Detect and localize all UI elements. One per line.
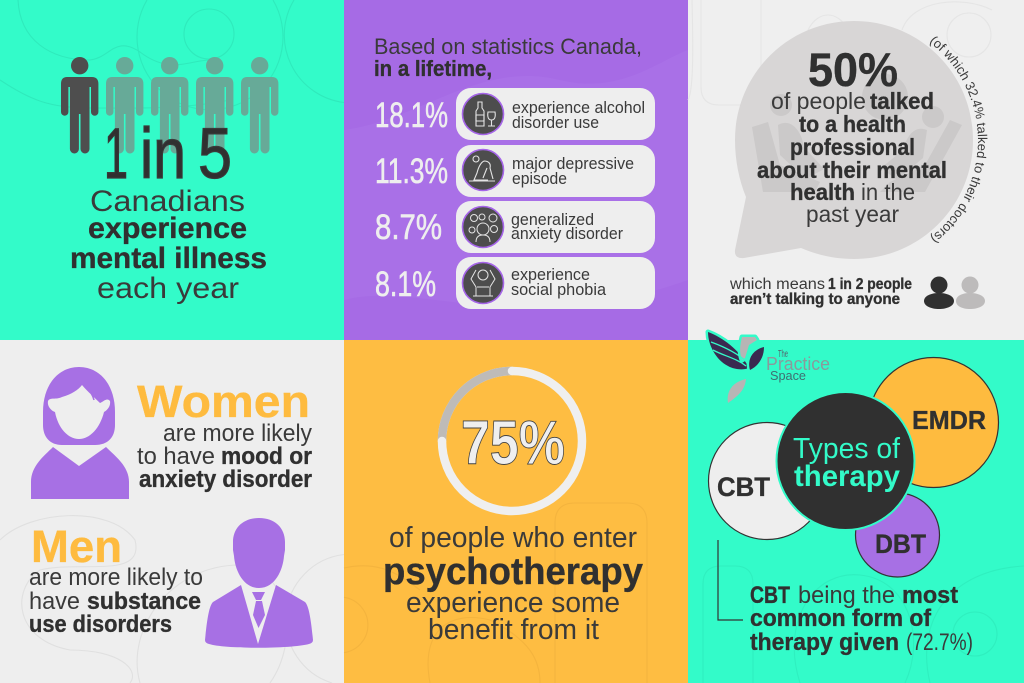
stat: 11.3% major depressive episode: 11.3%: [375, 152, 448, 191]
text block: people who talked to a professional: past year: [806, 201, 899, 227]
text block: people who enter psychotherapy: psychotherapy: [383, 551, 643, 593]
logo: The Practice Space: Practice: [766, 354, 830, 374]
text block: CBT most common: CBT: [750, 582, 790, 609]
text block: men more likely: [29, 564, 203, 638]
bubble: EMDR: EMDR: [912, 405, 986, 435]
text block: 1 in 2 people: aren’t talking to anyone: [730, 291, 900, 308]
bubble: CBT: CBT: [717, 472, 770, 502]
bubble: DBT: DBT: [875, 529, 926, 559]
stat: 8.7% generalized anxiety disorder: [375, 201, 655, 253]
bubble: Types of therapy: therapy: [794, 460, 900, 493]
bubble: Types of therapy: Types of: [793, 433, 901, 465]
heading: Women: Women: [137, 376, 310, 427]
stat: 18.1% experience alcohol disorder use: [375, 88, 655, 140]
stat: 18.1% experience alcohol disorder use: experience alcohol: [512, 99, 645, 117]
panel: talking to a professional: [688, 0, 992, 309]
stat: 8.1% experience social phobia: experience: [511, 266, 590, 284]
heading: 1 in 5: in: [140, 115, 186, 194]
bubble: Types of therapy: [776, 392, 914, 530]
text block: people who talked to a professional: of people: [771, 88, 866, 114]
icon: person hiding head in arms: [462, 262, 504, 304]
stat: 8.1% experience social phobia: social phobia: [511, 281, 607, 299]
text block: CBT most common: being the: [798, 582, 895, 609]
text block: people who talked to a professional: about their mental: [757, 157, 947, 183]
bubble: EMDR: [868, 358, 998, 488]
heading: Men: Men: [31, 521, 122, 572]
text block: Canadians experience mental illness each year: mental illness: [70, 242, 267, 275]
text block: people who enter psychotherapy: [383, 522, 643, 646]
text block: people who talked to a professional: health: [790, 179, 855, 205]
text block: people who talked to a professional: in the: [861, 179, 915, 205]
bubble: CBT: [708, 422, 826, 540]
stat: 11.3% major depressive episode: major depressive: [512, 155, 634, 173]
stat: 11.3% major depressive episode: [375, 145, 655, 197]
text block: people who talked to a professional: to a health: [799, 111, 906, 137]
text block: people who enter psychotherapy: experience some: [406, 587, 620, 619]
text block: men more likely: substance: [87, 588, 201, 615]
logo: The Practice Space: Space: [770, 368, 806, 383]
panel: women and men: [0, 340, 344, 683]
text block: women more likely: mood or: [221, 443, 312, 470]
icon: bottle and wine glass: [462, 94, 504, 134]
text block: women more likely: [137, 420, 312, 493]
text block: Canadians experience mental illness each year: each year: [97, 272, 239, 305]
heading: 1 in 5: 5: [198, 115, 232, 194]
text block: women more likely: anxiety disorder: [139, 466, 312, 493]
icon: person sitting with head on knees: [462, 150, 504, 190]
chart: 75% ring: [438, 367, 582, 511]
text block: Canadians experience mental illness each year: [70, 185, 267, 305]
text block: CBT most common: most: [902, 582, 958, 609]
panel: types of therapy: [688, 332, 1024, 683]
heading: 1 in 5: 1: [104, 115, 128, 194]
icon: man in suit: [205, 518, 313, 648]
text block: CBT most common: therapy given: [750, 629, 899, 656]
panel: 1 in 5 Canadians: [0, 0, 344, 340]
text block: people who talked to a professional: professional: [790, 134, 915, 160]
logo: The Practice Space: The: [778, 349, 788, 360]
icon: five people, one highlighted: [61, 57, 278, 154]
heading: Based on statistics Canada, in a lifetime: Based on statistics Canada,: [374, 34, 642, 59]
text block: 1 in 2 people: which means: [729, 276, 825, 293]
icon: woman: [31, 367, 129, 499]
heading: 1 in 5: [104, 115, 232, 194]
stat: 8.7% generalized anxiety disorder: generalized: [511, 211, 594, 229]
text block: CBT most common: [750, 582, 973, 656]
text block: men more likely: are more likely to: [29, 564, 203, 591]
stat: 11.3% major depressive episode: episode: [512, 170, 567, 188]
icon: anxious person with thought bubbles: [462, 206, 504, 248]
text block: people who enter psychotherapy: of people who enter: [389, 522, 637, 554]
text block: people who talked to a professional: [757, 88, 947, 227]
panel: psychotherapy: [344, 340, 688, 683]
text block: women more likely: are more likely: [163, 420, 312, 447]
arrow: connector from CBT to caption: [718, 540, 743, 620]
text block: Canadians experience mental illness each year: experience: [88, 212, 247, 245]
panel: lifetime statistics: [344, 0, 688, 340]
curved note: of which 32.4% talked to their doctors: (of which 32.4% talked to their doctors): [930, 36, 988, 243]
stat: 8.1% experience social phobia: [375, 257, 655, 309]
stat: 8.7% generalized anxiety disorder: 8.7%: [375, 208, 442, 247]
text block: people who enter psychotherapy: benefit from it: [428, 614, 599, 646]
text block: 1 in 2 people: 1 in 2 people: [828, 276, 912, 293]
chart: 75% ring: 75%: [461, 409, 565, 478]
text block: men more likely: use disorders: [29, 611, 172, 638]
heading: Based on statistics Canada, in a lifetime: [374, 34, 642, 81]
speech bubble with caring hands: [735, 21, 973, 259]
heading: 50%: 50%: [808, 43, 898, 96]
text block: people who talked to a professional: talked: [870, 88, 934, 114]
icon: two people, one dark one grey: [924, 276, 985, 309]
stat: 18.1% experience alcohol disorder use: 18.1%: [375, 96, 448, 135]
logo: The Practice Space: [708, 332, 830, 403]
stat: 8.1% experience social phobia: 8.1%: [375, 265, 436, 304]
text block: CBT most common: common form of: [750, 605, 932, 632]
heading: Based on statistics Canada, in a lifetime: in a lifetime,: [374, 56, 492, 81]
icon: hands holding people: [752, 74, 962, 192]
text block: men more likely: have: [29, 588, 80, 615]
text block: 1 in 2 people: [729, 276, 912, 308]
text block: women more likely: to have: [137, 443, 215, 470]
bubble: DBT: [856, 493, 940, 577]
stat: 18.1% experience alcohol disorder use: disorder use: [512, 114, 599, 132]
text block: Canadians experience mental illness each year: Canadians: [90, 185, 245, 218]
stat: 8.7% generalized anxiety disorder: anxiety disorder: [511, 225, 623, 243]
text block: CBT most common: (72.7%): [906, 629, 973, 656]
